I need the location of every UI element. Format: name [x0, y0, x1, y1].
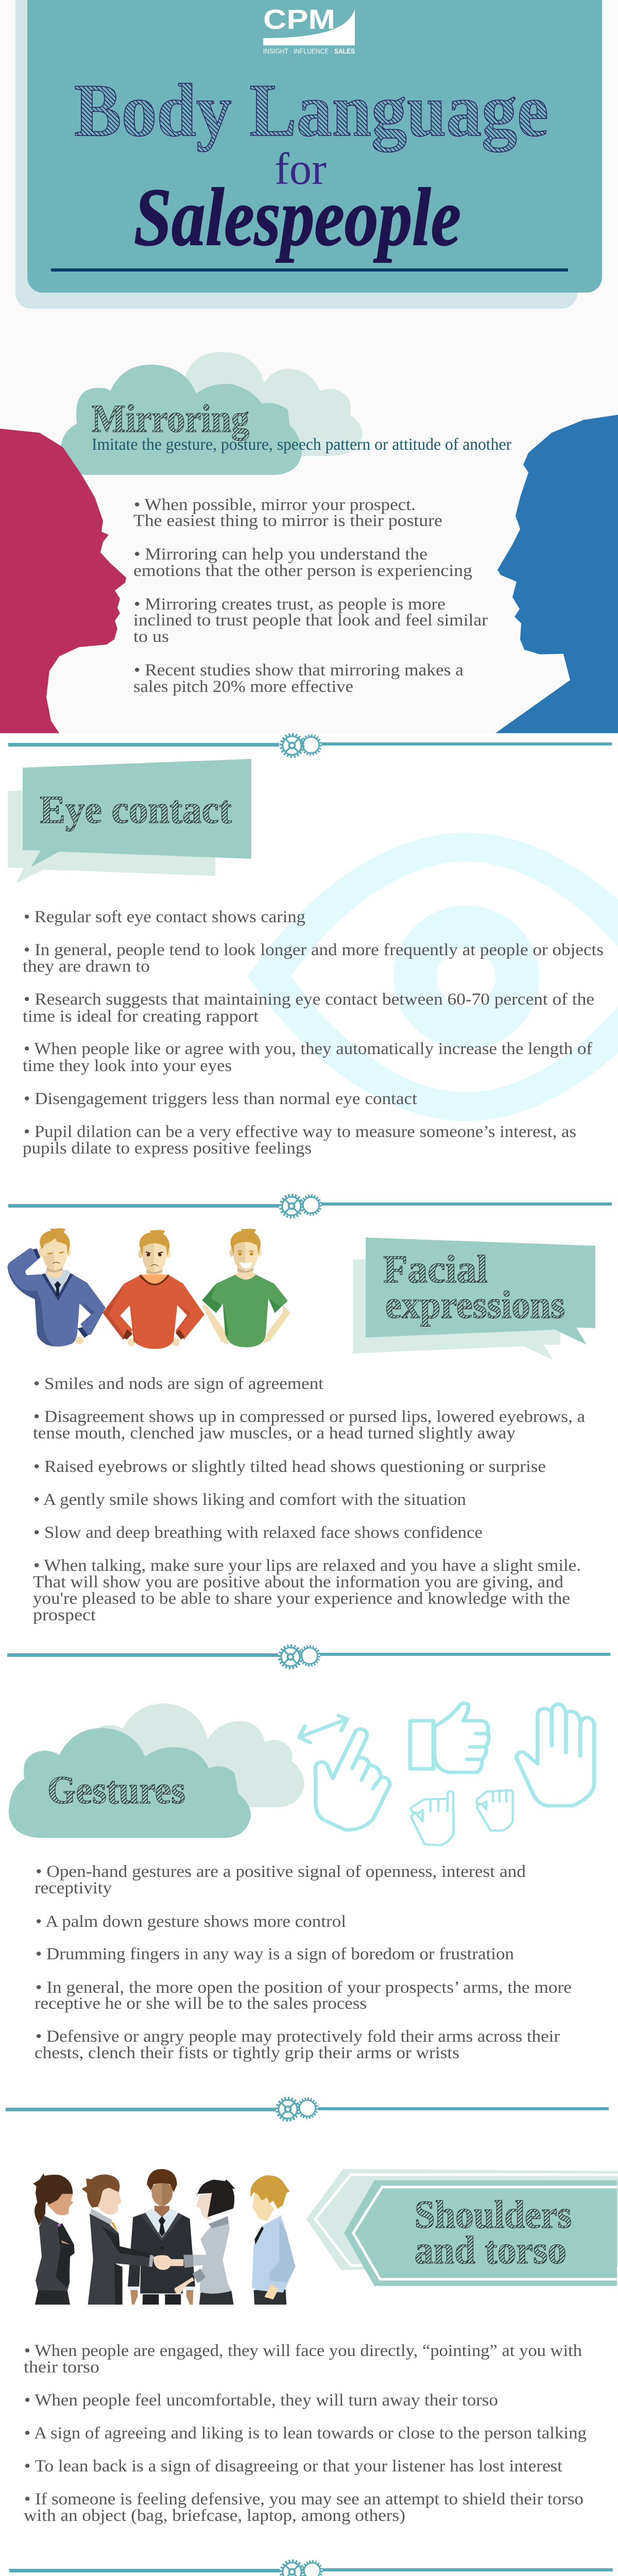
- title: Salespeople: Salespeople: [134, 171, 461, 263]
- bullet: defensive: with an object (bag, briefcase, laptop, among others): [24, 2506, 405, 2525]
- bullet: disagreement: [33, 1408, 585, 1443]
- icon: small hand one: [411, 1791, 454, 1845]
- bullet: look longer: • In general, people tend to look longer and more frequently at people or objects: [24, 941, 604, 959]
- bullet: like or agree: time they look into your eyes: [23, 1057, 232, 1075]
- bullet: 60-70 percent: time is ideal for creating rapport: [23, 1007, 259, 1026]
- bullet: defensive: • If someone is feeling defensive, you may see an attempt to shield their torso: [24, 2490, 583, 2509]
- section: eye contact: [8, 759, 618, 1158]
- title: Body Language: Body Language: [74, 69, 548, 152]
- divider with gears: [8, 735, 612, 756]
- bullet: disengagement: • Disengagement triggers less than normal eye contact: [24, 1090, 417, 1108]
- cloud behind heading: [60, 352, 363, 475]
- bullet: when talking: prospect: [33, 1606, 96, 1624]
- bullet: lean back: • To lean back is a sign of disagreeing or that your listener has lost interest: [24, 2457, 562, 2476]
- section: gestures: [9, 1703, 594, 2062]
- title: for: for: [274, 144, 327, 194]
- bullet: understand emotions: [133, 545, 472, 580]
- bullet: 60-70 percent: • Research suggests that maintaining eye contact between 60-70 percent of the: [24, 990, 594, 1009]
- bullet: defensive: [35, 2027, 560, 2062]
- bullet: when talking: • When talking, make sure your lips are relaxed and you have a slight smile.: [33, 1556, 581, 1575]
- logo: CPM: INSIGHT · INFLUENCE · SALES: [263, 47, 355, 55]
- header panel: [15, 0, 602, 309]
- bullet: recent studies: sales pitch 20% more effective: [133, 677, 353, 696]
- man in centre, front facing: [128, 2169, 195, 2304]
- heading: Shoulders and torso: Shoulders: [415, 2193, 572, 2236]
- man covering face, blue sweater: [8, 1228, 106, 1347]
- bullet: disagreement: • Disagreement shows up in compressed or pursed lips, lowered eyebrows, a: [33, 1408, 585, 1426]
- section: mirroring: [0, 352, 618, 733]
- bullet: pupil dilation: • Pupil dilation can be a very effective way to measure someone’s interest, as: [24, 1123, 576, 1141]
- logo: CPM: [263, 4, 355, 55]
- bullet: lean towards: • A sign of agreeing and liking is to lean towards or close to the person talking: [24, 2424, 587, 2443]
- speech bubble: [353, 1238, 595, 1360]
- bullet: uncomfortable: • When people feel uncomfortable, they will turn away their torso: [24, 2391, 498, 2410]
- heading: Facial expressions: Facial: [383, 1248, 488, 1291]
- bullet: open arms: [35, 1978, 572, 2013]
- bullet: creates trust: inclined to trust people that look and feel similar: [133, 611, 488, 630]
- illustration: five colleagues: [33, 2169, 295, 2304]
- divider with gears: [8, 1195, 612, 1217]
- bullet: smiles and nods: • Smiles and nods are sign of agreement: [33, 1375, 323, 1393]
- bullet: when talking: [33, 1556, 581, 1624]
- bullet: engaged: [24, 2342, 582, 2377]
- man suit body and arm: [88, 2214, 154, 2304]
- bullet: creates trust: [133, 595, 488, 646]
- bullet: defensive: [24, 2490, 583, 2525]
- logo: CPM: CPM: [263, 4, 335, 35]
- bullet: pupil dilation: pupils dilate to express positive feelings: [23, 1139, 312, 1158]
- silhouette: man: [495, 415, 618, 733]
- divider with gears: [7, 1646, 610, 1668]
- bullet: open-hand: receptivity: [35, 1879, 112, 1897]
- paper background: [0, 0, 618, 733]
- divider with gears: [6, 2098, 609, 2120]
- subtitle: Imitate the gesture, posture, speech pattern or attitude of another: [92, 435, 511, 454]
- bullet: look longer: [23, 941, 604, 976]
- bullet: when talking: you're pleased to be able to share your experience and knowledge with the: [33, 1589, 570, 1608]
- bullet: recent studies: • Recent studies show that mirroring makes a: [134, 661, 464, 680]
- clouds: [9, 1703, 304, 1838]
- bullet: like or agree: • When people like or agree with you, they automatically increase the length of: [24, 1040, 592, 1058]
- bullet: soft eye contact: • Regular soft eye contact shows caring: [24, 908, 305, 926]
- bullet: engaged: • When people are engaged, they will face you directly, “pointing” at you with: [24, 2342, 582, 2360]
- bullet: open-hand: [35, 1862, 526, 1897]
- heading: Mirroring: Mirroring: [92, 397, 249, 440]
- bullet: creates trust: • Mirroring creates trust, as people is more: [134, 595, 445, 614]
- panel: [27, 0, 602, 293]
- bullet: deep breathing: • Slow and deep breathing with relaxed face shows confidence: [33, 1523, 483, 1542]
- heading: Eye contact: Eye contact: [40, 788, 232, 832]
- panel shadow: [15, 0, 577, 309]
- speech bubble: [8, 759, 251, 883]
- heading: Gestures: Gestures: [47, 1769, 185, 1812]
- bullet: understand emotions: emotions that the other person is experiencing: [133, 562, 472, 580]
- bullet: defensive: • Defensive or angry people may protectively fold their arms across their: [36, 2027, 560, 2046]
- icon: small hand two: [477, 1790, 513, 1831]
- section: shoulders and torso: [24, 2169, 618, 2525]
- icon: eye watermark: [248, 833, 618, 1121]
- heading: Facial expressions: expressions: [385, 1283, 565, 1327]
- bullet: when talking: That will show you are positive about the information you are giving, and: [33, 1573, 564, 1591]
- bullet: palm down: • A palm down gesture shows more control: [36, 1912, 346, 1931]
- man smiling, green t-shirt: [202, 1229, 290, 1347]
- silhouette: woman: [0, 429, 126, 733]
- bullet: disagreement: tense mouth, clenched jaw muscles, or a head turned slightly away: [33, 1424, 516, 1443]
- bullet: mirror your prospect: [133, 496, 442, 530]
- bullet: open arms: • In general, the more open the position of your prospects’ arms, the more: [36, 1978, 572, 1997]
- bullet: like or agree: [23, 1040, 592, 1075]
- bullet: understand emotions: • Mirroring can help you understand the: [134, 545, 427, 564]
- arrow banner: [306, 2169, 618, 2286]
- icon: thumbs up: [410, 1703, 489, 1772]
- bullet: look longer: they are drawn to: [23, 957, 150, 976]
- bullet: creates trust: to us: [133, 628, 169, 646]
- bullet: open-hand: • Open-hand gestures are a positive signal of openness, interest and: [36, 1862, 526, 1881]
- bullet: engaged: their torso: [24, 2358, 99, 2377]
- icon: pointing hand: [315, 1729, 390, 1830]
- illustration: three men: [8, 1228, 290, 1349]
- bullet: drumming fingers: • Drumming fingers in any way is a sign of boredom or frustration: [36, 1945, 514, 1963]
- man in dark suit, head: [81, 2175, 122, 2232]
- heading: Shoulders and torso: and torso: [415, 2229, 566, 2272]
- bullet: mirror your prospect: • When possible, mirror your prospect.: [134, 496, 416, 514]
- bullet: 60-70 percent: [23, 990, 594, 1026]
- bullet: open arms: receptive he or she will be to the sales process: [35, 1994, 367, 2013]
- title rule: [51, 268, 568, 272]
- icons: hands: [299, 1703, 594, 1845]
- woman with bob haircut: [153, 2179, 235, 2304]
- icon: swipe arrow: [299, 1716, 347, 1742]
- bullet: gentle smile: • A gently smile shows liking and comfort with the situation: [33, 1490, 466, 1509]
- man frowning, orange sweater: [102, 1230, 204, 1349]
- man in pale blue shirt: [250, 2175, 295, 2304]
- heading: Facial expressions: [383, 1248, 565, 1327]
- bullet: mirror your prospect: The easiest thing to mirror is their posture: [133, 512, 442, 530]
- woman with arms crossed: [33, 2173, 75, 2304]
- heading: Shoulders and torso: [415, 2193, 572, 2272]
- section: facial expressions: [8, 1228, 595, 1624]
- bullet: pupil dilation: [23, 1123, 576, 1158]
- icon: open hand: [516, 1704, 594, 1806]
- bullet: defensive: chests, clench their fists or tightly grip their arms or wrists: [35, 2044, 459, 2062]
- bullet: recent studies: [133, 661, 464, 696]
- divider with gears: [9, 2561, 613, 2576]
- bullet: raised eyebrows: • Raised eyebrows or slightly tilted head shows questioning or surprise: [33, 1458, 546, 1476]
